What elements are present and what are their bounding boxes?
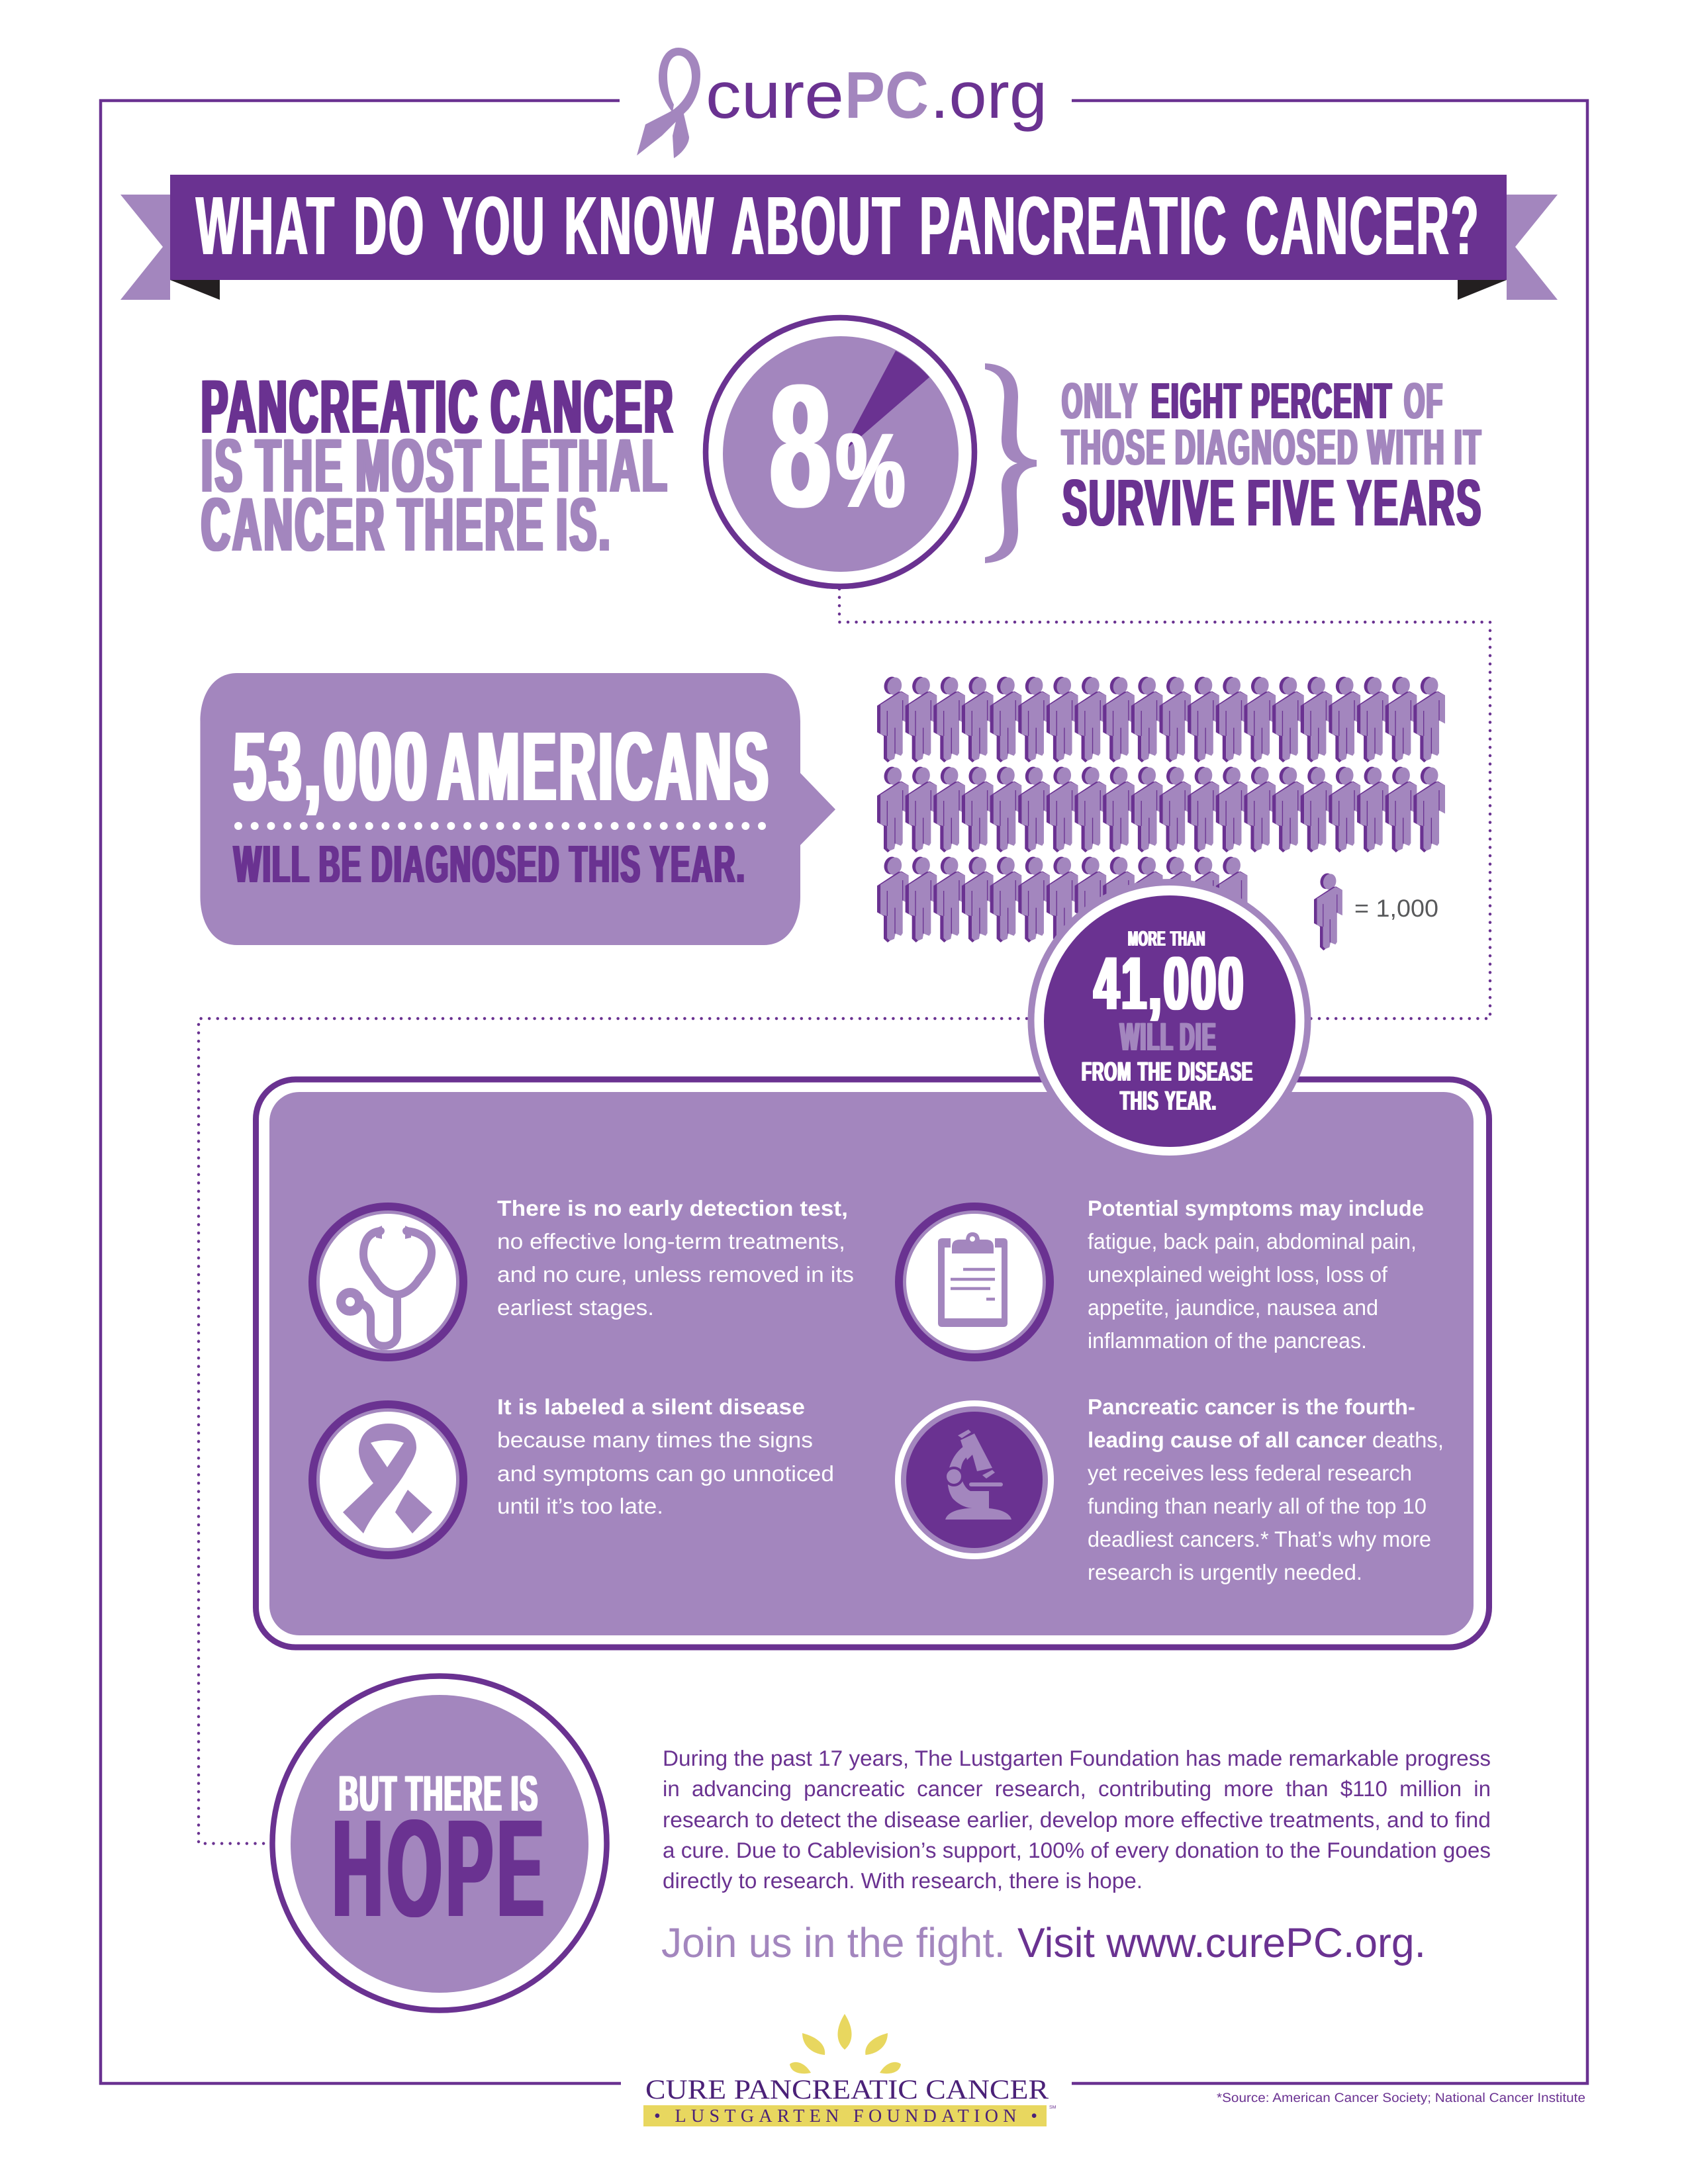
text: fourth-leading cause: deadliest cancers.* That’s why more (1088, 1527, 1431, 1551)
text: progress paragraph: directly to research. With research, there is hope. (663, 1868, 1143, 1893)
badge: 41,000 will die: FROM THE DISEASE (1082, 1056, 1253, 1087)
text: silent disease: and symptoms can go unnoticed (497, 1461, 834, 1486)
badge: 41,000 will die (1027, 879, 1311, 1162)
call to action (661, 1920, 1426, 1966)
logo: Cure Pancreatic Cancer, Lustgarten Foundation: • LUSTGARTEN FOUNDATION • (654, 2106, 1037, 2126)
text: fourth-leading cause: Pancreatic cancer is the fourth- (1088, 1394, 1415, 1419)
callout number: 53,000 (234, 712, 430, 821)
icon: clipboard (899, 1206, 1050, 1357)
chart: 8 percent pie: 8 (770, 348, 831, 543)
badge: 41,000 will die: MORE THAN (1128, 927, 1205, 950)
callout subtext: WILL BE DIAGNOSED THIS YEAR. (234, 835, 746, 893)
callout bubble (200, 673, 835, 945)
banner ribbon tails (120, 195, 220, 300)
callout: 53,000 Americans (200, 673, 835, 945)
badge: but there is hope: BUT THERE IS (339, 1766, 539, 1822)
text: fourth-leading cause: leading cause of all cancer (1088, 1428, 1366, 1452)
badge: 41,000 will die: 41,000 (1094, 942, 1246, 1026)
headline: most lethal cancer: IS THE MOST LETHAL (201, 424, 669, 508)
icon: awareness ribbon (312, 1404, 463, 1555)
text: fourth-leading cause (1088, 1394, 1444, 1584)
text: progress paragraph: in advancing pancreatic cancer research, contributing more than $110 million in (663, 1776, 1491, 1801)
banner bar (170, 175, 1507, 280)
headline: eight percent survive: ONLY (1062, 373, 1139, 430)
icon: yellow leaves (790, 2014, 901, 2073)
title banner (120, 175, 1558, 300)
text: fourth-leading cause: deaths, (1372, 1428, 1444, 1452)
text: potential symptoms: inflammation of the pancreas. (1088, 1328, 1367, 1353)
text: silent disease: It is labeled a silent disease (497, 1394, 805, 1419)
text: potential symptoms: fatigue, back pain, abdominal pain, (1088, 1229, 1417, 1253)
text: no early detection test (497, 1196, 854, 1320)
dotted connector lines (199, 589, 1490, 1844)
text: progress paragraph: research to detect the disease earlier, develop more effective treatments, and to find (663, 1807, 1491, 1832)
logo wordmark (706, 58, 1047, 132)
logo: Cure Pancreatic Cancer, Lustgarten Foundation: SM (1049, 2105, 1056, 2110)
text: no early detection test: earliest stages. (497, 1295, 654, 1320)
text: progress paragraph: During the past 17 years, The Lustgarten Foundation has made remarkable progress (663, 1746, 1491, 1770)
text: progress paragraph: a cure. Due to Cablevision’s support, 100% of every donation to the Foundation goes (663, 1838, 1491, 1862)
call to action: Join us in the fight. (661, 1920, 1006, 1966)
text: no early detection test: no effective long-term treatments, (497, 1229, 845, 1253)
headline: eight percent survive (1062, 373, 1483, 540)
text: silent disease: until it’s too late. (497, 1494, 663, 1518)
text: fourth-leading cause: research is urgently needed. (1088, 1560, 1362, 1584)
dotted divider (238, 822, 763, 830)
text: potential symptoms: appetite, jaundice, nausea and (1088, 1295, 1378, 1320)
chart: 8 percent pie (706, 318, 974, 586)
legend: one person equals 1,000 (1314, 872, 1438, 950)
text: fourth-leading cause: yet receives less federal research (1088, 1461, 1412, 1485)
text: potential symptoms: unexplained weight loss, loss of (1088, 1262, 1388, 1287)
panel fill (269, 1092, 1474, 1635)
headline: eight percent survive: OF (1404, 373, 1444, 430)
text: potential symptoms: Potential symptoms may include (1088, 1196, 1424, 1220)
badge: but there is hope: HOPE (332, 1792, 548, 1946)
chart: 8 percent pie: % (836, 411, 905, 529)
logo: curePC.org (637, 48, 1047, 158)
text: no early detection test: There is no early detection test, (497, 1196, 848, 1220)
callout: 53,000 Americans: AMERICANS (438, 712, 771, 821)
logo wordmark: PC (845, 58, 929, 132)
headline: most lethal cancer: CANCER THERE IS. (201, 482, 612, 567)
call to action: Visit www.curePC.org. (1017, 1920, 1426, 1966)
text: no early detection test: and no cure, unless removed in its (497, 1262, 854, 1287)
organization name: CURE PANCREATIC CANCER (645, 2075, 1049, 2105)
logo wordmark: .org (930, 58, 1047, 132)
badge: 41,000 will die: THIS YEAR. (1120, 1085, 1217, 1116)
logo wordmark: cure (706, 58, 844, 132)
text: silent disease: because many times the signs (497, 1428, 813, 1452)
text: progress paragraph (663, 1746, 1491, 1893)
panel: facts (256, 1079, 1489, 1647)
legend: one person equals 1,000: = 1,000 (1354, 895, 1438, 922)
text: potential symptoms (1088, 1196, 1424, 1353)
yellow name bar (643, 2105, 1047, 2126)
page frame (101, 101, 1587, 2083)
badge: 41,000 will die: WILL DIE (1120, 1015, 1217, 1059)
icon: microscope (898, 1403, 1051, 1557)
banner folds (170, 280, 220, 300)
text: silent disease (497, 1394, 834, 1518)
icon: logo ribbon (637, 48, 700, 158)
brace (985, 363, 1037, 563)
icon: stethoscope (312, 1206, 463, 1357)
headline: most lethal cancer: PANCREATIC CANCER (201, 365, 675, 449)
logo: Cure Pancreatic Cancer, Lustgarten Foundation (643, 2014, 1056, 2126)
pictogram: 53 people (877, 675, 1445, 942)
panel border (256, 1079, 1489, 1647)
badge: but there is hope (273, 1676, 606, 2011)
text: fourth-leading cause: funding than nearly all of the top 10 (1088, 1494, 1427, 1518)
source note: *Source: American Cancer Society; National Cancer Institute (1217, 2091, 1585, 2105)
headline: eight percent survive: EIGHT PERCENT (1151, 373, 1393, 430)
headline: most lethal cancer (201, 365, 675, 567)
